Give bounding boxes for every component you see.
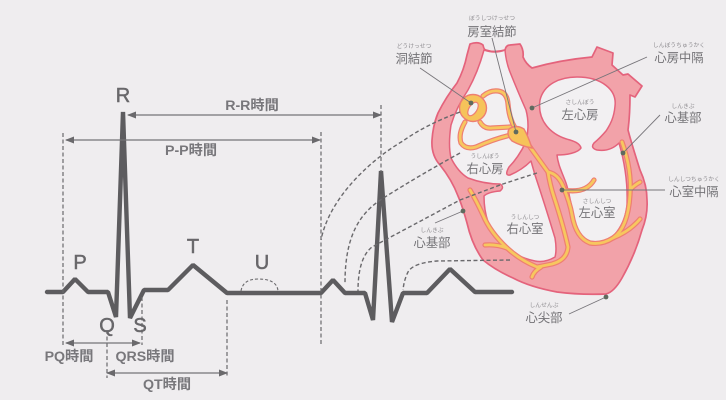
label: atrioventricular node: 房室結節 xyxy=(467,25,517,39)
leader dots xyxy=(461,101,625,299)
U wave dashed curve xyxy=(241,279,278,291)
conduction system xyxy=(460,91,640,277)
label: left ventricle xyxy=(579,198,615,220)
wave letters: T xyxy=(187,236,199,258)
arrows xyxy=(66,115,381,373)
label: atrial septum: 心房中隔 xyxy=(654,50,704,65)
label: cardiac base left xyxy=(414,227,450,250)
heart diagram xyxy=(432,43,647,294)
interval labels: QRS時間 xyxy=(115,348,175,365)
wave letters: S xyxy=(133,315,147,337)
conduction to ECG dashed curves xyxy=(321,112,537,291)
label: sinoatrial node: どうけっせつ xyxy=(397,42,432,50)
wave letters: Q xyxy=(99,315,115,337)
interval labels: QT時間 xyxy=(143,376,191,393)
label: cardiac base right: 心基部 xyxy=(665,111,701,125)
label: ventricular septum: 心室中隔 xyxy=(669,184,719,199)
label: atrial septum xyxy=(653,42,705,65)
left atrium and ventricle cavity xyxy=(540,77,627,243)
arrow: P-P interval xyxy=(66,139,320,141)
label: left atrium xyxy=(562,99,598,122)
label: cardiac base right: しんきぶ xyxy=(671,103,695,110)
timing guide lines xyxy=(63,105,381,378)
label: left ventricle: 左心室 xyxy=(579,205,615,220)
label: left ventricle: さしんしつ xyxy=(583,198,612,205)
sinoatrial node xyxy=(460,94,486,122)
arrow: R-R interval xyxy=(128,114,381,116)
wave letters xyxy=(73,85,269,337)
arrow: QT interval xyxy=(107,372,227,374)
wave letters: U xyxy=(255,252,269,274)
label: right ventricle: 右心室 xyxy=(507,221,543,236)
label: cardiac apex: しんせんぶ xyxy=(530,302,559,309)
label: atrioventricular node xyxy=(467,15,517,39)
label: atrial septum: しんぼうちゅうかく xyxy=(653,42,705,49)
wave letters: P xyxy=(73,252,87,274)
right atrium and ventricle cavity xyxy=(450,50,556,262)
label: cardiac base left: 心基部 xyxy=(414,236,450,250)
label: right atrium xyxy=(467,153,503,176)
label: left atrium: 左心房 xyxy=(562,107,598,122)
label: ventricular septum xyxy=(668,176,720,199)
bundle branches and Purkinje fibres xyxy=(470,140,640,277)
label: sinoatrial node xyxy=(396,42,432,66)
arrow: PQ and QRS interval xyxy=(66,342,140,344)
leader lines xyxy=(420,38,665,314)
label: cardiac apex xyxy=(526,302,562,325)
label: sinoatrial node: 洞結節 xyxy=(396,52,432,66)
interval labels: PQ時間 xyxy=(45,348,93,365)
label: cardiac base left: しんきぶ xyxy=(420,227,444,234)
interval labels: R-R時間 xyxy=(225,97,279,114)
internodal tracts xyxy=(460,91,515,148)
ECG trace xyxy=(47,112,512,322)
label: atrioventricular node: ぼうしつけっせつ xyxy=(469,15,515,22)
interval labels: P-P時間 xyxy=(165,142,217,159)
label: left atrium: さしんぼう xyxy=(566,99,594,106)
label: right atrium: うしんぼう xyxy=(470,153,500,160)
label: right ventricle: うしんしつ xyxy=(511,214,540,221)
wave letters: R xyxy=(116,85,130,107)
label: ventricular septum: しんしつちゅうかく xyxy=(668,176,720,183)
label: cardiac apex: 心尖部 xyxy=(526,311,562,325)
label: right atrium: 右心房 xyxy=(467,161,503,176)
heart muscle wall xyxy=(432,43,647,294)
atrioventricular node xyxy=(508,126,532,148)
label: right ventricle xyxy=(507,214,543,236)
label: cardiac base right xyxy=(665,103,701,125)
interval labels xyxy=(45,97,279,393)
